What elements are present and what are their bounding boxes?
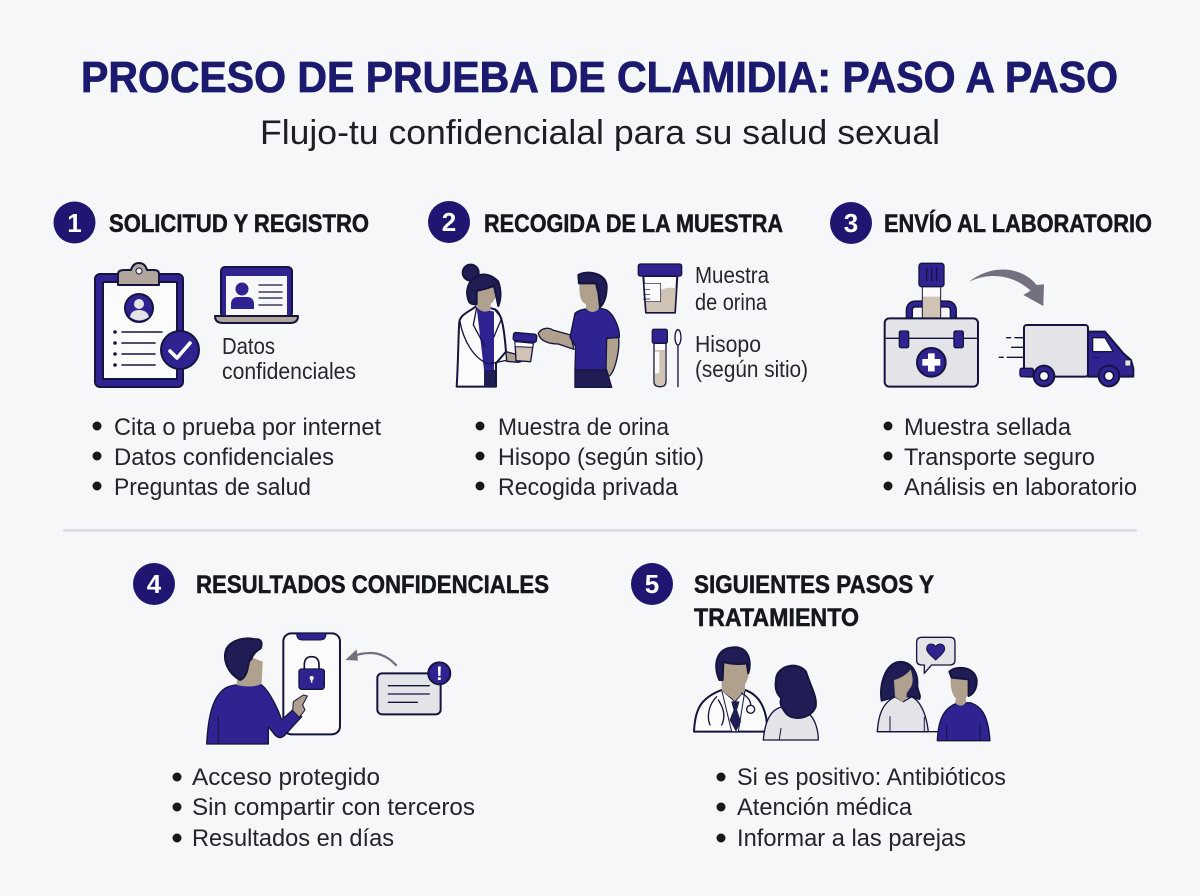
step 5 number badge bbox=[631, 563, 673, 605]
step 5 bullet list: Atención médica bbox=[737, 794, 912, 821]
step 2 heading: RECOGIDA DE LA MUESTRA bbox=[484, 210, 783, 238]
panel: step 4 bbox=[133, 563, 549, 852]
title: PROCESO DE PRUEBA DE CLAMIDIA: PASO A PASO bbox=[81, 53, 1118, 102]
icon: urine sample cup bbox=[638, 264, 682, 313]
caption: hisopo: Hisopo bbox=[695, 331, 761, 357]
icon: delivery truck bbox=[999, 325, 1133, 386]
panel: step 2 bbox=[428, 201, 808, 501]
step 1 bullet list: Cita o prueba por internet bbox=[114, 414, 381, 441]
step 4 bullet list: Acceso protegido bbox=[192, 764, 380, 791]
step 1 bullet list: Datos confidenciales bbox=[114, 444, 334, 471]
step 5 heading: SIGUIENTES PASOS Y bbox=[694, 571, 934, 599]
caption: hisopo bbox=[695, 331, 808, 382]
step 3 bullet list: Análisis en laboratorio bbox=[904, 474, 1137, 501]
step 3 heading: ENVÍO AL LABORATORIO bbox=[884, 209, 1152, 238]
icon: sealed sample kit bbox=[885, 263, 978, 387]
caption: muestra de orina bbox=[695, 262, 769, 315]
illustration: couple talking bbox=[877, 637, 990, 741]
step 1 bullet list bbox=[92, 414, 381, 501]
step 2 bullet list bbox=[476, 414, 704, 501]
icon: clipboard with check bbox=[95, 263, 199, 387]
arrow: notification to phone bbox=[345, 649, 396, 665]
step 2 bullet list: Recogida privada bbox=[498, 474, 678, 501]
caption: datos confidenciales bbox=[222, 333, 356, 384]
illustration: doctor and patient bbox=[694, 647, 818, 740]
step 5 bullet list bbox=[716, 764, 1006, 852]
step 4 bullet list: Sin compartir con terceros bbox=[192, 794, 475, 821]
step 1 heading: SOLICITUD Y REGISTRO bbox=[109, 210, 369, 238]
subtitle: Flujo-tu confidencialal para su salud sexual bbox=[260, 114, 940, 152]
step 5 bullet list: Si es positivo: Antibióticos bbox=[737, 764, 1006, 791]
step 3 number badge: 3 bbox=[844, 208, 858, 238]
step 5 heading: TRATAMIENTO bbox=[694, 604, 859, 632]
caption: datos confidenciales: confidenciales bbox=[222, 358, 356, 384]
caption: datos confidenciales: Datos bbox=[222, 333, 275, 359]
caption: muestra de orina: de orina bbox=[695, 289, 767, 315]
step 1 bullet list: Preguntas de salud bbox=[114, 474, 311, 501]
step 4 number badge bbox=[133, 563, 175, 605]
step 2 number badge bbox=[428, 201, 470, 243]
illustration: person unlocking results on phone bbox=[207, 633, 340, 744]
step 2 bullet list: Muestra de orina bbox=[498, 414, 669, 441]
step 4 number badge: 4 bbox=[147, 569, 162, 599]
step 3 number badge bbox=[830, 202, 872, 244]
arrow: kit to truck bbox=[969, 270, 1044, 306]
panel: step 3 bbox=[830, 202, 1152, 501]
step 2 number badge: 2 bbox=[442, 207, 456, 237]
step 2 bullet list: Hisopo (según sitio) bbox=[498, 444, 704, 471]
step 1 number badge bbox=[54, 202, 96, 244]
illustration: health worker handing cup to patient bbox=[457, 265, 619, 387]
step 5 number badge: 5 bbox=[645, 569, 659, 599]
step 4 heading: RESULTADOS CONFIDENCIALES bbox=[196, 571, 549, 599]
step 4 bullet list: Resultados en días bbox=[192, 825, 394, 852]
icon: laptop bbox=[215, 267, 298, 323]
step 4 bullet list bbox=[172, 764, 475, 852]
caption: muestra de orina: Muestra bbox=[695, 262, 769, 288]
step 3 bullet list bbox=[884, 414, 1137, 501]
step 5 bullet list: Informar a las parejas bbox=[737, 825, 966, 852]
step 1 number badge: 1 bbox=[67, 208, 82, 238]
icon: test tube and swab bbox=[652, 329, 681, 387]
icon: message with alert badge: ! bbox=[436, 664, 443, 685]
panel: step 5 bbox=[631, 563, 1006, 852]
caption: hisopo: (según sitio) bbox=[695, 356, 808, 382]
step 3 bullet list: Transporte seguro bbox=[904, 444, 1095, 471]
step 5 heading bbox=[694, 571, 934, 632]
icon: message with alert badge bbox=[377, 662, 450, 714]
panel: step 1 bbox=[54, 202, 381, 501]
step 3 bullet list: Muestra sellada bbox=[904, 414, 1071, 441]
